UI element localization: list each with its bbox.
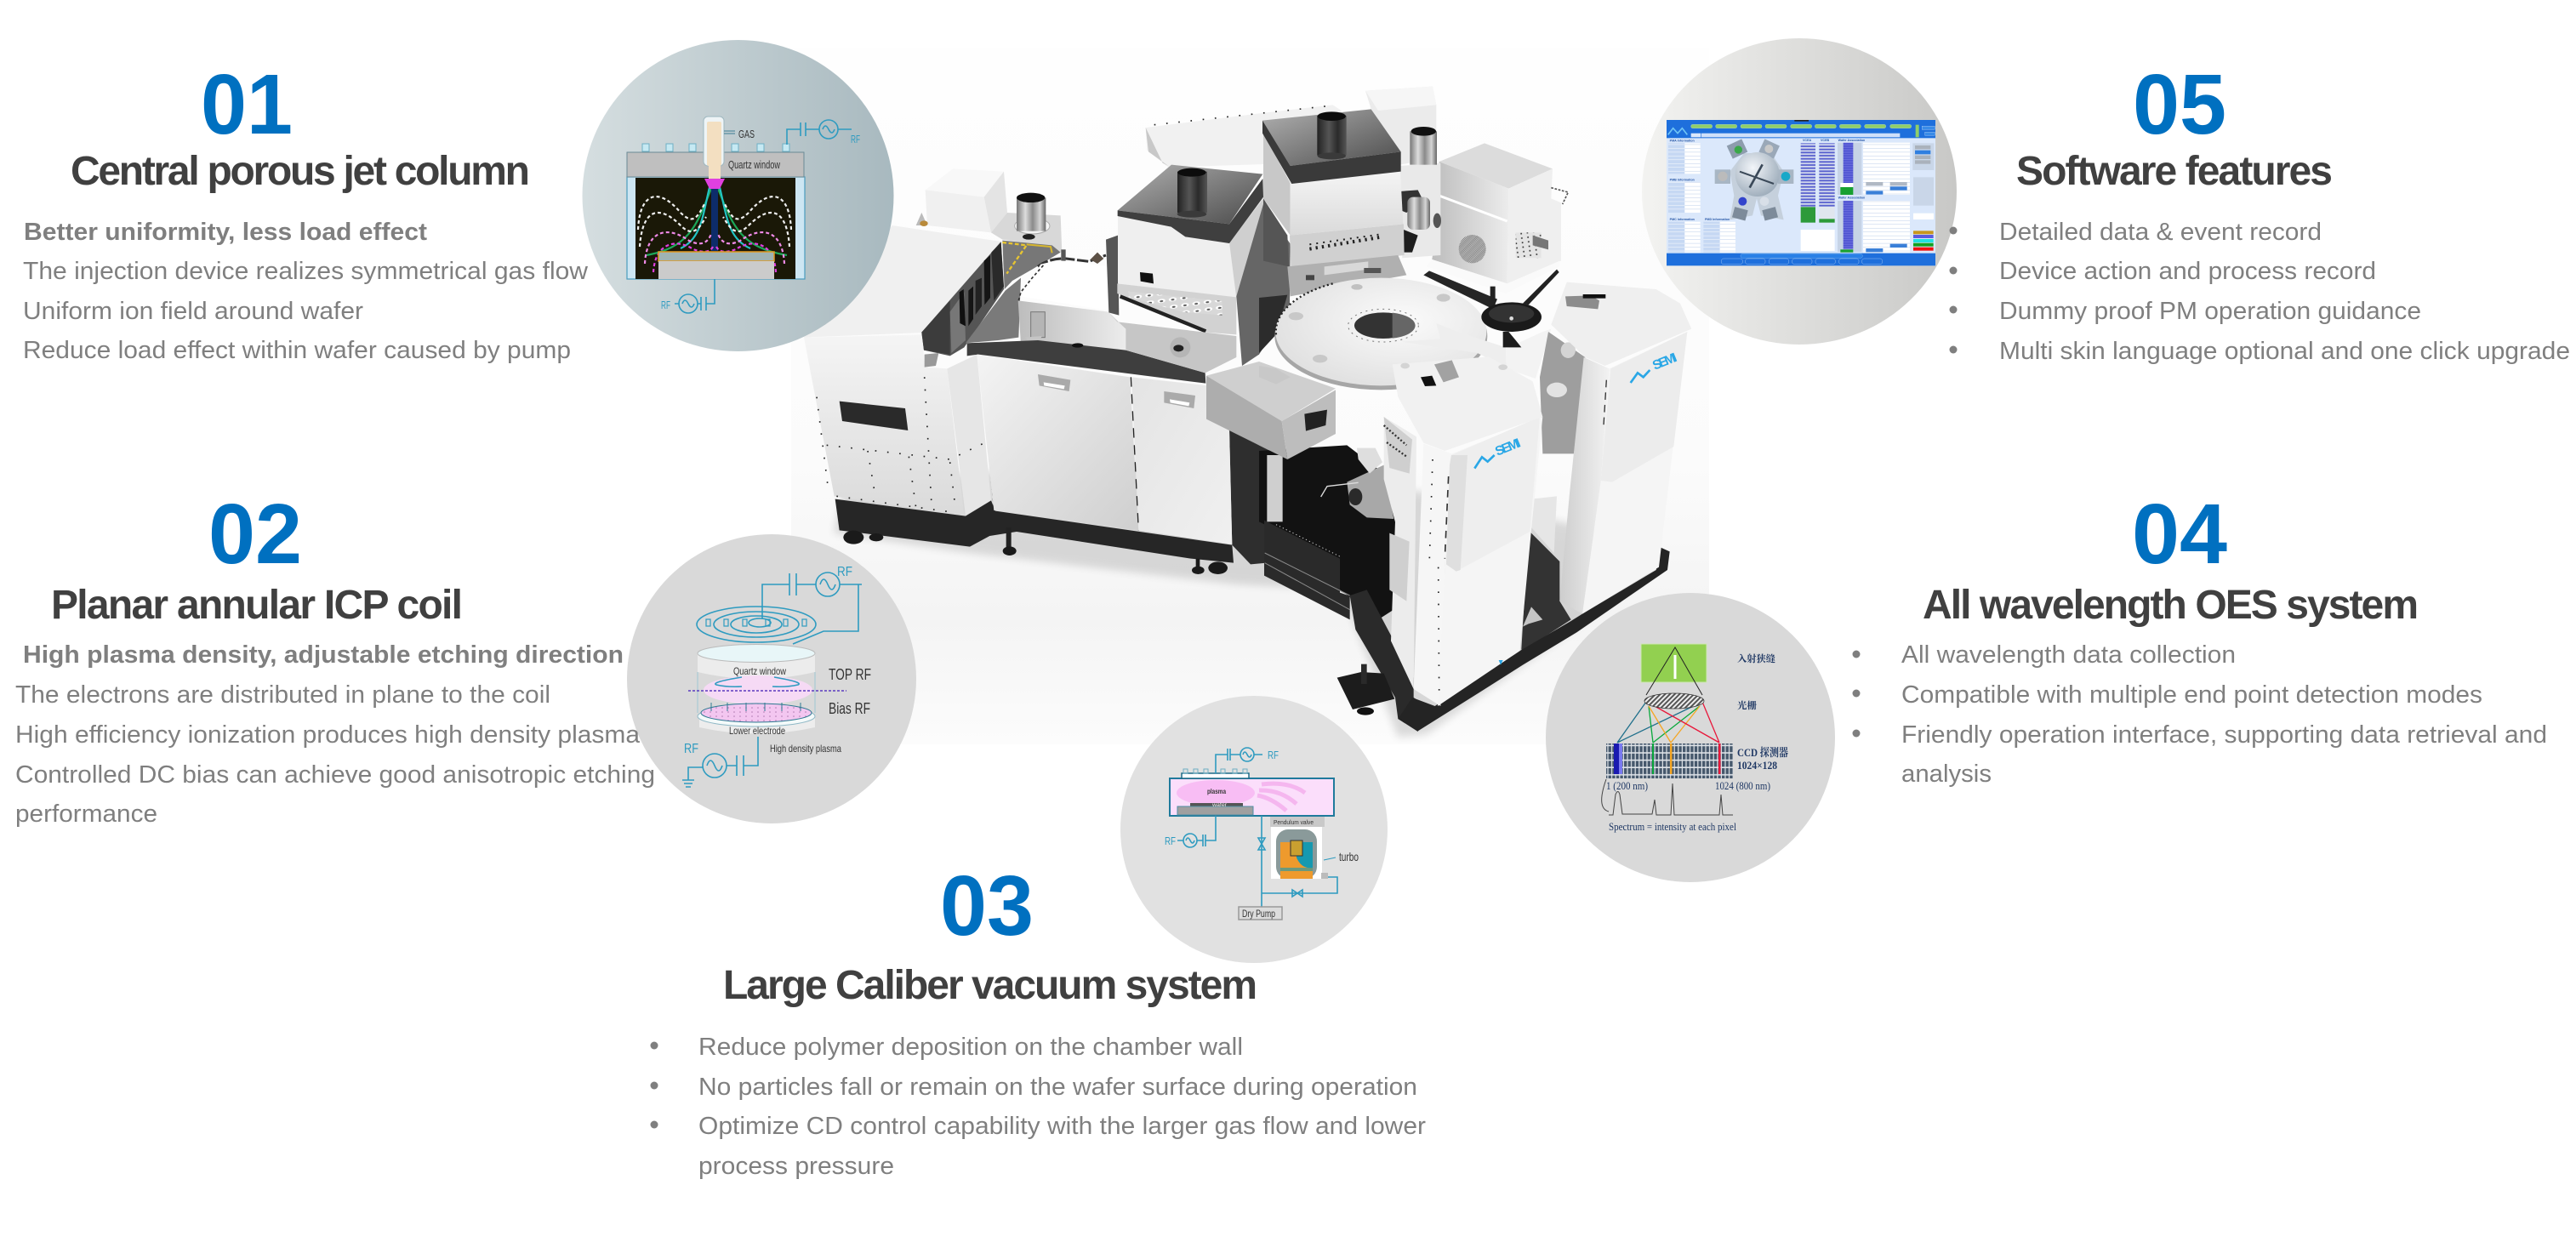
process module B [1262, 109, 1406, 296]
bullet list [1853, 641, 2547, 788]
lower electrode: Lower electrode [729, 725, 785, 737]
chamber info tables [1668, 140, 1735, 253]
process module C [1423, 143, 1568, 309]
circle 3: vacuum system diagram [1120, 696, 1388, 963]
section 05: software features [1950, 57, 2570, 365]
operate column and wafer status [1912, 143, 1934, 251]
label: grating: 光栅 [1737, 699, 1757, 711]
module D top face [1259, 356, 1542, 451]
chamber lid with coils [1182, 769, 1249, 778]
label: turbo: turbo [1339, 850, 1359, 863]
disc [1546, 593, 1835, 882]
circle 1: central jet diagram [582, 40, 893, 351]
chamber info tables: PMA Information [1670, 140, 1695, 143]
white plates and wheel [1401, 287, 1551, 379]
section 02: planar annular ICP coil [15, 487, 655, 828]
floor shadow [834, 453, 1653, 738]
number 04: 04 [2132, 487, 2227, 582]
circle 5: software screen [1642, 38, 1957, 345]
bottom RF source: RF [661, 299, 670, 311]
wafer stage [658, 252, 774, 279]
chamber info tables: PMC Information [1670, 218, 1695, 221]
gas pipe link [1038, 249, 1106, 266]
pendulum valve [1270, 817, 1325, 827]
lower RF circuit [682, 737, 758, 787]
illustration: etch machine [804, 87, 1691, 738]
section 03: large caliber vacuum system [650, 858, 1426, 1180]
bullet list: Dummy proof PM operation guidance [1999, 298, 2421, 325]
body text: Reduce load effect within wafer caused by pump [23, 337, 571, 364]
heading: All wavelength OES system [1923, 583, 2419, 628]
bottom RF: RF [1165, 835, 1176, 847]
grey funnel with yellow cable [1002, 241, 1061, 289]
upper RF circuit: RF [837, 565, 852, 579]
process module D [1357, 417, 1542, 706]
foreline piping [1258, 816, 1337, 907]
bullet list [1950, 219, 2570, 365]
quartz window cylinder [698, 645, 815, 713]
body text [15, 641, 655, 828]
label: last pixel: 1024 (800 nm) [1715, 779, 1770, 792]
body text: High plasma density, adjustable etching direction [23, 641, 624, 669]
lower black bay [1259, 445, 1670, 732]
plasma field lines [638, 180, 791, 272]
label: Dry Pump: Dry Pump [1242, 908, 1275, 920]
process module A [1106, 165, 1265, 373]
body text: performance [15, 800, 157, 828]
back cabinet [1365, 87, 1436, 164]
body text: Better uniformity, less load effect [24, 219, 427, 246]
chamber [627, 177, 805, 279]
bullet list: No particles fall or remain on the wafer surface during operation [698, 1074, 1417, 1101]
disc [1642, 38, 1957, 345]
heading: Software features [2016, 149, 2333, 194]
wafer association panels: Wafer Association [1838, 139, 1865, 142]
bullet list: Detailed data & event record [1999, 219, 2322, 246]
label: Quartz window: Quartz window [728, 158, 780, 171]
grating [1644, 693, 1704, 709]
platform hub [1715, 139, 1793, 221]
bullet list: Multi skin language optional and one click upgrade [1999, 338, 2570, 365]
platform and pipe shelf [966, 260, 1205, 384]
chamber [1170, 778, 1334, 816]
label: spectrum: Spectrum = intensity at each pixel [1609, 820, 1736, 833]
label: High density plasma: High density plasma [770, 743, 841, 755]
bullet list: process pressure [698, 1153, 894, 1180]
body text: Uniform ion field around wafer [23, 298, 363, 325]
coil stubs [642, 144, 789, 151]
lower electrode [698, 703, 815, 737]
label: TOP RF: TOP RF [829, 666, 871, 683]
top RF source [787, 120, 860, 145]
heading: Planar annular ICP coil [51, 583, 463, 628]
load lock columns: VCEB [1821, 139, 1830, 142]
process module E [1540, 282, 1691, 614]
bullet list: All wavelength data collection [1901, 641, 2236, 669]
bottom RF source [661, 279, 715, 313]
number 02: 02 [208, 487, 302, 582]
mechanical strip [1236, 204, 1291, 366]
number 01: 01 [201, 57, 293, 152]
spectrum trace [1602, 779, 1733, 815]
label: first pixel: 1 (200 nm) [1606, 779, 1648, 792]
circle 4: OES spectrometer diagram [1546, 593, 1835, 882]
dark gap beside doors [1229, 428, 1282, 564]
bullet list [650, 1034, 1426, 1180]
planar coil [697, 607, 816, 642]
quartz window [627, 152, 804, 177]
quartz window cylinder: Quartz window [733, 665, 786, 677]
top RF [1216, 748, 1279, 773]
gas jet column [704, 117, 735, 189]
bottom RF [1165, 816, 1216, 847]
body text: High efficiency ionization produces high density plasma [15, 721, 641, 749]
software screenshot [1667, 120, 1935, 265]
chamber info tables: PMB Information [1670, 179, 1695, 182]
label: turbo [1324, 850, 1359, 863]
label: CCD size: 1024×128 [1737, 759, 1777, 772]
bullet list: analysis [1901, 761, 1992, 788]
plasma region [688, 675, 846, 704]
bullet list: Reduce polymer deposition on the chamber wall [698, 1034, 1243, 1061]
left exhaust chimney [991, 193, 1062, 253]
grey service box [1206, 362, 1336, 459]
lower RF circuit: RF [684, 742, 698, 756]
body text [23, 219, 589, 364]
body text: The electrons are distributed in plane to the coil [15, 681, 550, 709]
heading: Central porous jet column [71, 149, 530, 194]
left main cabinet [804, 225, 1001, 516]
load lock columns: VCEA [1803, 139, 1812, 142]
chamber: wafer [1211, 803, 1227, 808]
heading: Large Caliber vacuum system [723, 963, 1257, 1008]
section 04: all wavelength OES system [1853, 487, 2547, 788]
disc [1120, 696, 1388, 963]
machine photo backdrop [791, 48, 1709, 744]
black plinth and feet [835, 499, 1234, 574]
back lid [1146, 105, 1342, 168]
rays [1617, 702, 1719, 743]
disc [582, 40, 893, 351]
circle 2: ICP coil diagram [627, 534, 916, 823]
bullet list: Optimize CD control capability with the larger gas flow and lower [698, 1113, 1426, 1140]
disc [627, 534, 916, 823]
label: entrance slit: 入射狭缝 [1737, 652, 1775, 664]
label: CCD detector: CCD 探测器 [1737, 746, 1788, 759]
body text: Controlled DC bias can achieve good anisotropic etching [15, 761, 655, 789]
left top box [916, 168, 1007, 232]
label: GAS: GAS [738, 128, 755, 140]
toolbar buttons [1691, 124, 1912, 128]
process module E: SEMI [1650, 350, 1679, 373]
chamber: plasma [1207, 788, 1226, 795]
cabinet doors [977, 355, 1232, 544]
central transfer disk [1259, 278, 1487, 390]
wafer association panels [1838, 139, 1910, 253]
louvered side panel [921, 242, 1004, 367]
bottom nav bar [1667, 254, 1935, 265]
load lock columns [1801, 139, 1835, 251]
second chimney and column [1399, 127, 1441, 258]
body text: The injection device realizes symmetrical gas flow [23, 258, 589, 285]
section 01: central porous jet column [23, 57, 589, 364]
entrance slit [1641, 644, 1707, 695]
bullet list: Friendly operation interface, supporting data retrieval and [1901, 721, 2547, 749]
CCD detector [1606, 743, 1733, 778]
wafer association panels: Wafer Association [1838, 197, 1865, 200]
top RF: RF [1268, 749, 1279, 761]
turbo pump [1271, 827, 1328, 879]
top RF source: RF [851, 133, 860, 145]
bullet list: Device action and process record [1999, 258, 2376, 285]
pendulum valve: Pendulum valve [1274, 820, 1314, 826]
label: Bias RF: Bias RF [829, 700, 870, 717]
bullet list: Compatible with multiple end point detection modes [1901, 681, 2482, 709]
chamber info tables: PMD Information [1705, 218, 1730, 221]
number 05: 05 [2133, 57, 2226, 152]
upper RF circuit [762, 565, 862, 644]
process module D: SEMI [1493, 436, 1523, 459]
number 03: 03 [940, 858, 1034, 954]
